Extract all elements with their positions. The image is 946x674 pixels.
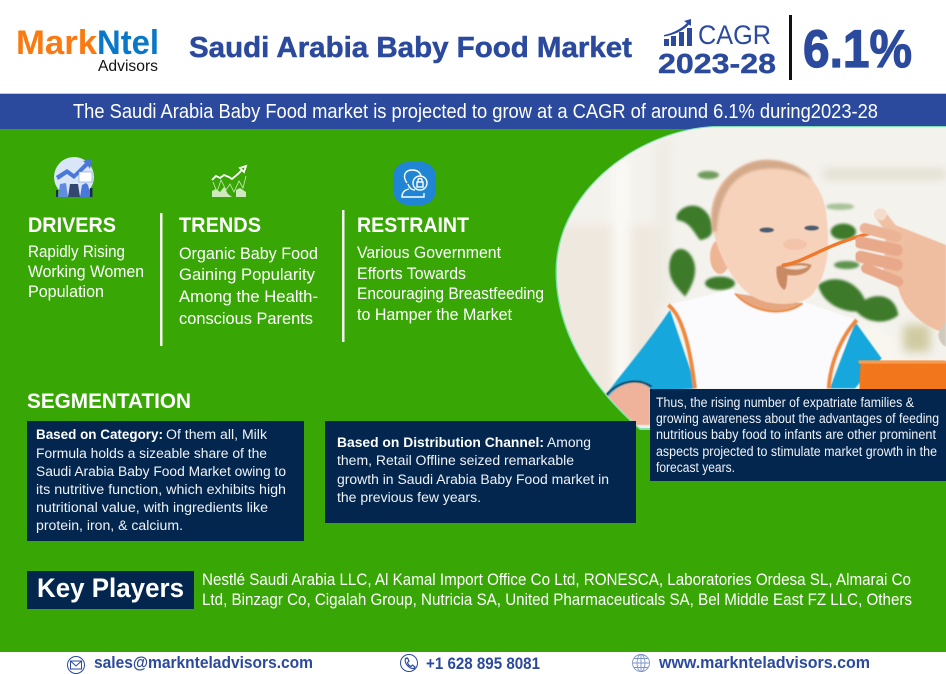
panel: restraint: RESTRAINT [357,214,469,237]
CAGR badge: CAGR [698,20,771,50]
subtitle band [0,93,946,129]
CAGR badge [658,15,912,80]
footer contact bar: www.marknteladvisors.com [658,654,870,672]
segmentation box: distribution channel: Among [547,435,591,450]
panel: restraint: to Hamper the Market [357,306,512,324]
segmentation box: category: protein, iron, & calcium. [36,518,183,533]
panel: trends: Among the Health- [179,288,318,306]
panel: drivers: Population [28,283,104,301]
CAGR badge: 6.1% [803,20,912,79]
segmentation box: distribution channel: the previous few years. [337,490,481,505]
panel: trends: conscious Parents [179,310,313,328]
icon: restraint person with lock [393,162,436,205]
panel: trends: TRENDS [179,214,261,237]
panel: drivers: Working Women [28,263,144,281]
plant leaves [669,171,898,322]
panel: restraint: Efforts Towards [357,265,466,283]
icon: growth bars with arrow [664,19,692,46]
panel: restraint: Encouraging Breastfeeding [357,285,544,303]
panel: drivers [28,157,144,301]
footer contact bar: +1 628 895 8081 [426,655,540,673]
key players: Key Players [37,573,184,603]
callout: market growth note: nutritious baby food to infants are other prominent [656,427,936,442]
segmentation box: distribution channel: growth in Saudi Arabia Baby Food market in [337,472,609,487]
subtitle band: The Saudi Arabia Baby Food market is projected to grow at a CAGR of around 6.1% during2023-28 [73,101,878,123]
callout: market growth note: Thus, the rising number of expatriate families & [656,395,914,410]
callout: market growth note [650,389,946,481]
segmentation box: distribution channel: Based on Distribution Channel: [337,435,544,450]
footer contact bar: sales@marknteladvisors.com [94,654,313,672]
icon: email [68,656,84,674]
icon: drivers globe with people [54,157,94,197]
orange bowl [859,362,946,389]
logo: MarkNtel Advisors [16,24,159,75]
CAGR badge: 2023-28 [658,48,776,79]
key players [27,571,912,609]
icon: phone [400,654,418,672]
segmentation box: category: nutritional value, with ingredients like [36,500,268,515]
title: Saudi Arabia Baby Food Market [189,32,632,64]
segmentation box: distribution channel: them, Retail Offline seized remarkable [337,453,574,468]
baby photo [550,125,946,430]
spoon [783,233,870,265]
segmentation box: distribution channel [325,421,636,523]
feeding hand [860,208,946,347]
callout: market growth note: forecast years. [656,460,735,475]
segmentation box: category: Saudi Arabia Baby Food Market owing to [36,464,286,479]
segmentation box: category: Formula holds a sizeable share of the [36,446,267,461]
segmentation box: category [27,421,304,541]
panel: trends: Organic Baby Food [179,245,318,263]
footer contact bar [0,652,946,674]
segmentation box: category: its nutritive function, which exhibits high [36,482,286,497]
heading: segmentation: SEGMENTATION [27,390,191,413]
icon: trend line chart [212,166,246,197]
logo: MarkNtel Advisors: Advisors [98,58,158,75]
logo: MarkNtel Advisors: Mark [16,24,97,62]
panel: restraint [357,162,544,324]
panel: trends [179,166,318,328]
icon: globe [632,654,650,672]
baby [605,160,882,425]
panel: restraint: Various Government [357,244,501,262]
segmentation box: category: Of them all, Milk [166,427,267,442]
panel: trends: Gaining Popularity [179,266,316,284]
logo: MarkNtel Advisors: Ntel [97,24,159,62]
panel: drivers: DRIVERS [28,214,116,237]
panel: drivers: Rapidly Rising [28,243,125,261]
main green background panel [0,129,946,652]
segmentation box: category: Based on Category: [36,427,163,442]
